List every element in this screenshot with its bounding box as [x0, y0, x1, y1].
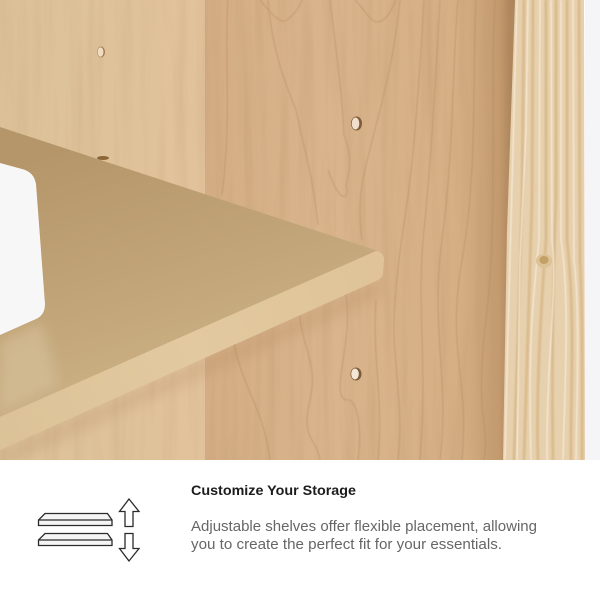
peg hole at shelf back: [97, 156, 109, 160]
white box: [0, 163, 45, 335]
shelf peg hole: top left: [97, 46, 105, 58]
bottom caption panel: [0, 460, 600, 600]
body text: you to create the perfect fit for your essentials.: [191, 536, 502, 553]
wood knot on post: [536, 254, 552, 268]
icon: down arrow: [120, 534, 139, 561]
back panel: left: [0, 0, 206, 460]
shadow under shelf: [0, 278, 383, 468]
back panel: right with grain: [205, 0, 515, 460]
icon: adjustable shelves: [38, 499, 139, 561]
icon: upper shelf: [38, 514, 112, 526]
shelf peg hole: top right: [351, 116, 362, 130]
icon: lower shelf: [38, 534, 112, 546]
off-white background strip: [585, 0, 600, 460]
wooden side post: [503, 0, 585, 460]
body text: Adjustable shelves offer flexible placement, allowing: [191, 518, 537, 535]
icon: up arrow: [120, 499, 139, 526]
shelf front edge: [0, 251, 384, 450]
heading: Customize Your Storage: [191, 482, 356, 498]
body text: [191, 518, 537, 553]
shelf peg hole: bottom: [350, 368, 362, 380]
reflection of box on shelf: [0, 322, 58, 412]
shelf top surface: [0, 127, 383, 417]
photo: shelf close-up: [0, 0, 600, 468]
